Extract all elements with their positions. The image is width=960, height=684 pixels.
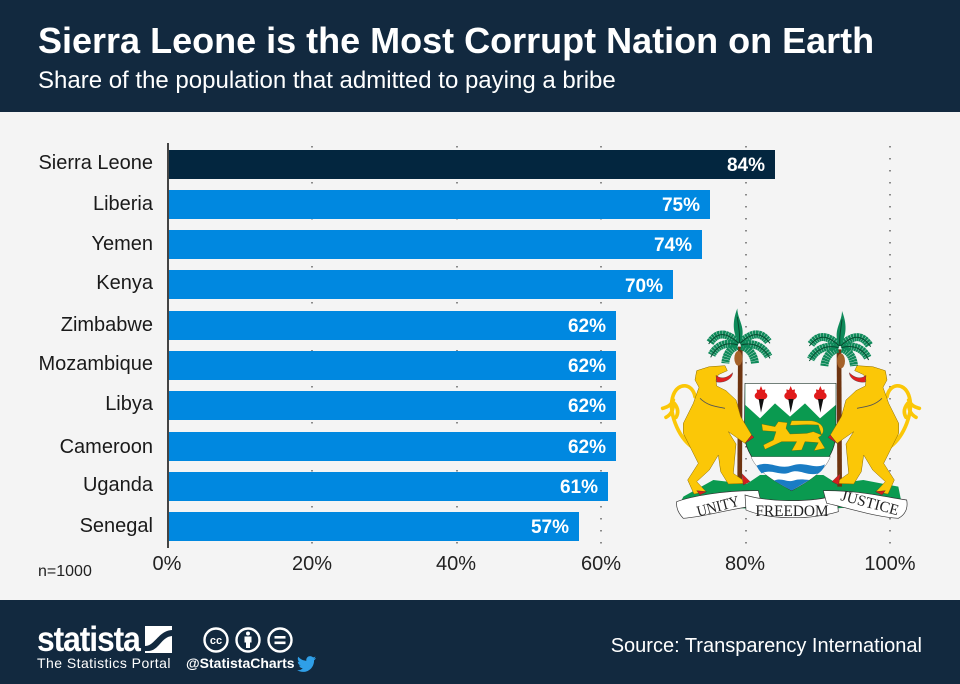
bar: Sierra Leone 84% [169, 150, 775, 179]
shield lion [762, 421, 825, 451]
bar: Yemen 74%: 74% [654, 235, 692, 256]
subtitle: Share of the population that admitted to paying a bribe [38, 67, 616, 94]
label: Uganda: Uganda [83, 474, 153, 496]
axis label 100%: 100% [864, 553, 916, 575]
header band [0, 0, 960, 112]
bar: Liberia 75%: 75% [662, 195, 700, 216]
bar: Mozambique 62%: 62% [568, 356, 606, 377]
bar: Liberia 75% [169, 190, 710, 219]
bar: Uganda 61% [169, 472, 608, 501]
icon: creative commons badges [203, 627, 293, 653]
bar: Libya 62% [169, 391, 616, 420]
label: Senegal: Senegal [80, 515, 153, 537]
label: Cameroon: Cameroon [60, 436, 153, 458]
axis label 20%: 20% [292, 553, 332, 575]
bar: Cameroon 62%: 62% [568, 437, 606, 458]
axis label 0%: 0% [153, 553, 181, 575]
bar: Kenya 70% [169, 270, 673, 299]
bar: Senegal 57% [169, 512, 579, 541]
bar: Senegal 57%: 57% [531, 517, 569, 538]
ribbon word: JUSTICE: JUSTICE [839, 487, 901, 519]
bar: Sierra Leone 84%: 84% [727, 155, 765, 176]
label: Kenya: Kenya [96, 272, 153, 294]
axis label 40%: 40% [436, 553, 476, 575]
title: Sierra Leone is the Most Corrupt Nation on Earth [38, 20, 874, 61]
icon: Sierra Leone coat of arms [660, 308, 922, 521]
statista tagline: The Statistics Portal [37, 655, 171, 671]
icon: twitter bird [297, 656, 316, 672]
ribbon word: UNITY: UNITY [695, 493, 741, 521]
axis label 80%: 80% [725, 553, 765, 575]
sample size note: n=1000 [38, 563, 92, 580]
axis label 60%: 60% [581, 553, 621, 575]
source: Source: Transparency International [611, 635, 922, 657]
bar: Mozambique 62% [169, 351, 616, 380]
bar: Zimbabwe 62% [169, 311, 616, 340]
bar: Zimbabwe 62%: 62% [568, 316, 606, 337]
label: Liberia: Liberia [93, 193, 153, 215]
icon: creative commons badges: cc [210, 635, 222, 647]
icon: statista logo square [145, 626, 172, 653]
bar: Cameroon 62% [169, 432, 616, 461]
torches [755, 386, 827, 400]
label: Libya: Libya [105, 393, 153, 415]
label: Yemen: Yemen [91, 233, 153, 255]
ribbon word: FREEDOM: FREEDOM [755, 503, 829, 520]
statista wordmark: statista [37, 620, 140, 659]
bar: Libya 62%: 62% [568, 396, 606, 417]
label: Sierra Leone: Sierra Leone [38, 152, 153, 174]
footer band [0, 600, 960, 684]
bar: Yemen 74% [169, 230, 702, 259]
bar: Uganda 61%: 61% [560, 477, 598, 498]
twitter handle: @StatistaCharts [186, 655, 295, 671]
mound [680, 475, 902, 508]
label: Mozambique: Mozambique [38, 353, 153, 375]
bar: Kenya 70%: 70% [625, 276, 663, 297]
shield [744, 383, 836, 491]
label: Zimbabwe: Zimbabwe [61, 314, 153, 336]
ribbon [677, 491, 907, 518]
